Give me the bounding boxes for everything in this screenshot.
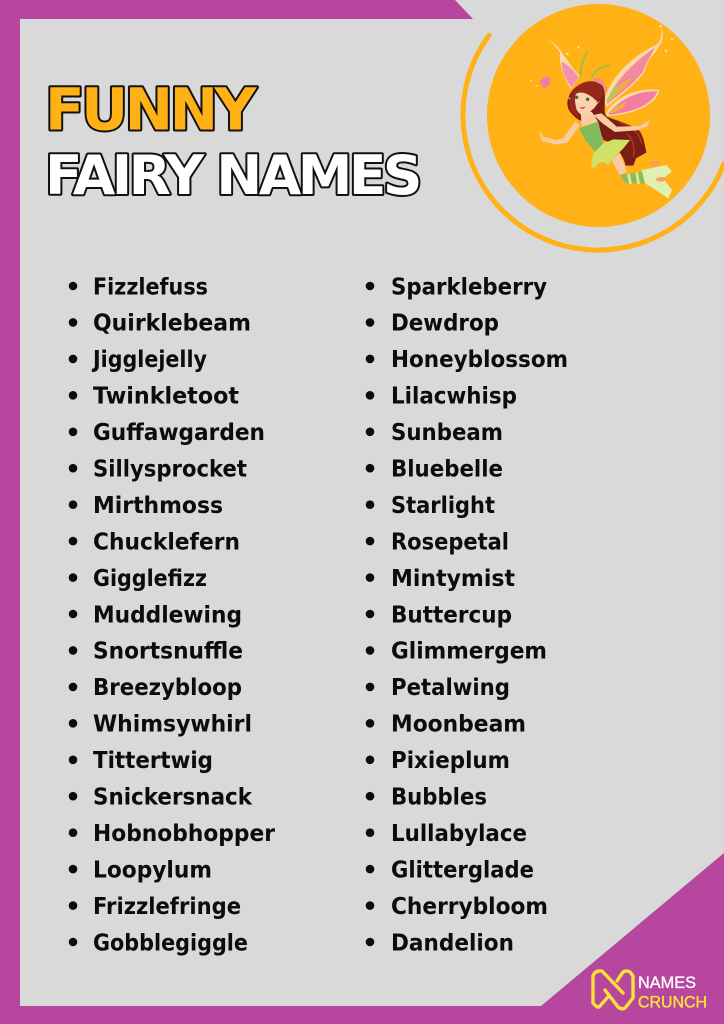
- name item: Pixieplum: [391, 748, 510, 774]
- name item: Moonbeam: [391, 712, 526, 738]
- skirt: [591, 139, 630, 169]
- name item: Twinkletoot: [93, 384, 239, 410]
- title line: FUNNY: FUNNY: [45, 76, 257, 144]
- antennae: [581, 52, 609, 77]
- name item: Gobblegiggle: [93, 930, 248, 956]
- name item: Breezybloop: [93, 675, 242, 701]
- thigh: [612, 153, 627, 176]
- name item: Jigglejelly: [91, 347, 207, 373]
- hair front: [569, 81, 603, 117]
- name item: Snortsnuffle: [93, 639, 243, 665]
- name item: Glimmergem: [391, 639, 547, 665]
- title: [45, 76, 419, 207]
- name item: Loopylum: [93, 857, 212, 883]
- logo wordmark line 1: NAMES: [638, 974, 696, 992]
- name item: Frizzlefringe: [93, 894, 241, 920]
- name item: Gigglefizz: [93, 566, 207, 592]
- boots: [642, 165, 672, 199]
- name item: Muddlewing: [93, 602, 242, 628]
- name item: Bubbles: [391, 784, 487, 810]
- name item: Dewdrop: [391, 311, 499, 337]
- decorative ring arc: [463, 35, 724, 250]
- name item: Petalwing: [391, 675, 510, 701]
- name item: Sillysprocket: [93, 456, 247, 482]
- name item: Rosepetal: [391, 529, 509, 555]
- name item: Quirklebeam: [93, 311, 251, 337]
- name item: Glitterglade: [391, 857, 534, 883]
- name item: Buttercup: [391, 602, 512, 628]
- name item: Snickersnack: [93, 784, 253, 810]
- name item: Bluebelle: [391, 456, 503, 482]
- torso: [579, 122, 605, 152]
- eyes and mouth: [575, 96, 589, 109]
- name item: Lilacwhisp: [391, 384, 517, 410]
- icon: fairy illustration: [530, 25, 673, 199]
- arms: [539, 122, 580, 145]
- logo: Names Crunch: [593, 971, 707, 1012]
- face: [573, 89, 597, 115]
- lower wing: [606, 90, 659, 116]
- ears: [567, 97, 600, 110]
- name item: Fizzlefuss: [93, 274, 208, 300]
- left wing: [546, 38, 580, 89]
- names list: column 2: [366, 274, 568, 956]
- logo wordmark line 2: CRUNCH: [638, 994, 707, 1012]
- name item: Sunbeam: [391, 420, 503, 446]
- name item: Guffawgarden: [93, 420, 265, 446]
- name item: Whimsywhirl: [93, 712, 252, 738]
- name item: Starlight: [391, 493, 495, 519]
- rear small wing: [593, 78, 607, 97]
- neck: [581, 112, 598, 127]
- name item: Lullabylace: [391, 821, 527, 847]
- hair highlights: [620, 123, 642, 157]
- logo icon: N mark: [593, 971, 633, 1009]
- name item: Sparkleberry: [391, 274, 547, 300]
- name item: Honeyblossom: [391, 347, 568, 373]
- name item: Tittertwig: [93, 748, 213, 774]
- name item: Cherrybloom: [391, 894, 548, 920]
- striped socks: [620, 172, 645, 183]
- butterfly: [540, 77, 551, 88]
- fairy sparkles: [530, 25, 673, 87]
- names list: column 1: [69, 274, 276, 956]
- orange circle: [487, 4, 710, 227]
- name item: Mirthmoss: [93, 493, 223, 519]
- name item: Hobnobhopper: [93, 821, 276, 847]
- name item: Mintymist: [391, 566, 515, 592]
- upper wing: [604, 26, 663, 107]
- name item: Chucklefern: [93, 529, 240, 555]
- hair back: [567, 82, 647, 166]
- title line: FAIRY NAMES: FAIRY NAMES: [45, 143, 419, 207]
- name item: Dandelion: [391, 930, 514, 956]
